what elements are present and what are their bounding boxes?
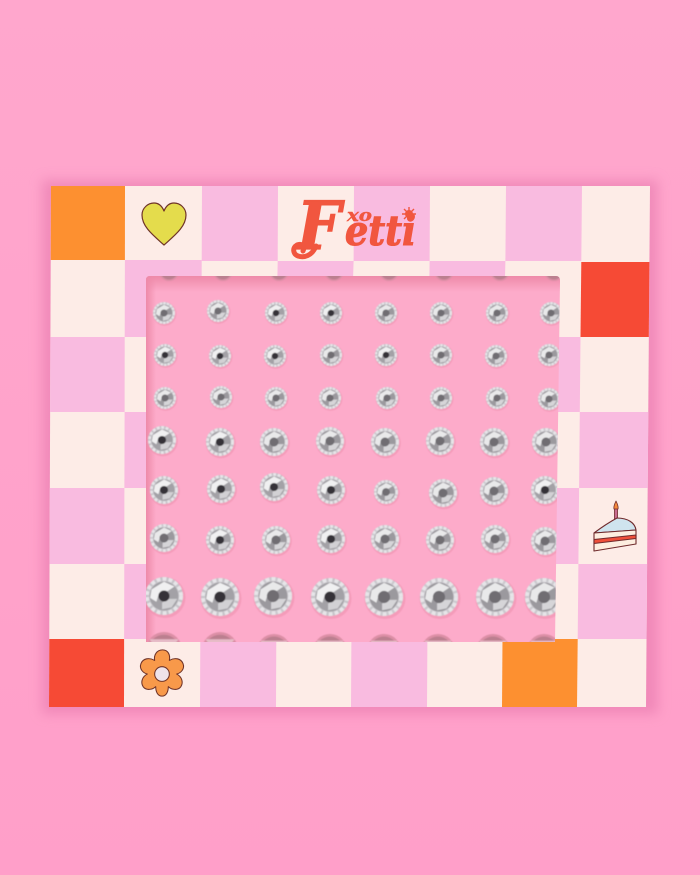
card shadow <box>42 180 658 714</box>
gem row 6 <box>150 524 561 557</box>
logo: xo Fetti: F <box>295 187 345 265</box>
logo: xo Fetti: xo <box>346 206 372 226</box>
gem row: cut-off top <box>160 276 560 281</box>
gem row 5 <box>150 473 561 509</box>
logo: xo Fetti: etti <box>345 207 416 255</box>
panel: window with gems <box>146 276 560 642</box>
icon: logo star <box>402 207 416 221</box>
icon: cake slice <box>594 501 636 551</box>
row 2 cells <box>125 260 649 337</box>
logo swash <box>294 244 316 257</box>
row 3 cells <box>50 337 581 412</box>
gem row: cut-off bottom <box>148 632 555 642</box>
icon: flower <box>140 650 184 696</box>
row 5 cells <box>50 488 579 564</box>
row 4 cells <box>124 412 648 488</box>
gem row 2 <box>154 344 561 369</box>
row 6 cells <box>124 564 647 639</box>
gem row 3 <box>154 386 561 412</box>
icon: heart <box>142 203 186 245</box>
gem row 1 <box>153 300 563 326</box>
gem row 4 <box>148 426 562 458</box>
row 1 cells <box>51 186 582 261</box>
logo: xo Fetti <box>294 187 416 265</box>
row 7 cells <box>49 639 578 707</box>
panel: checkered card frame <box>49 186 650 707</box>
gem row 7 <box>144 577 565 619</box>
